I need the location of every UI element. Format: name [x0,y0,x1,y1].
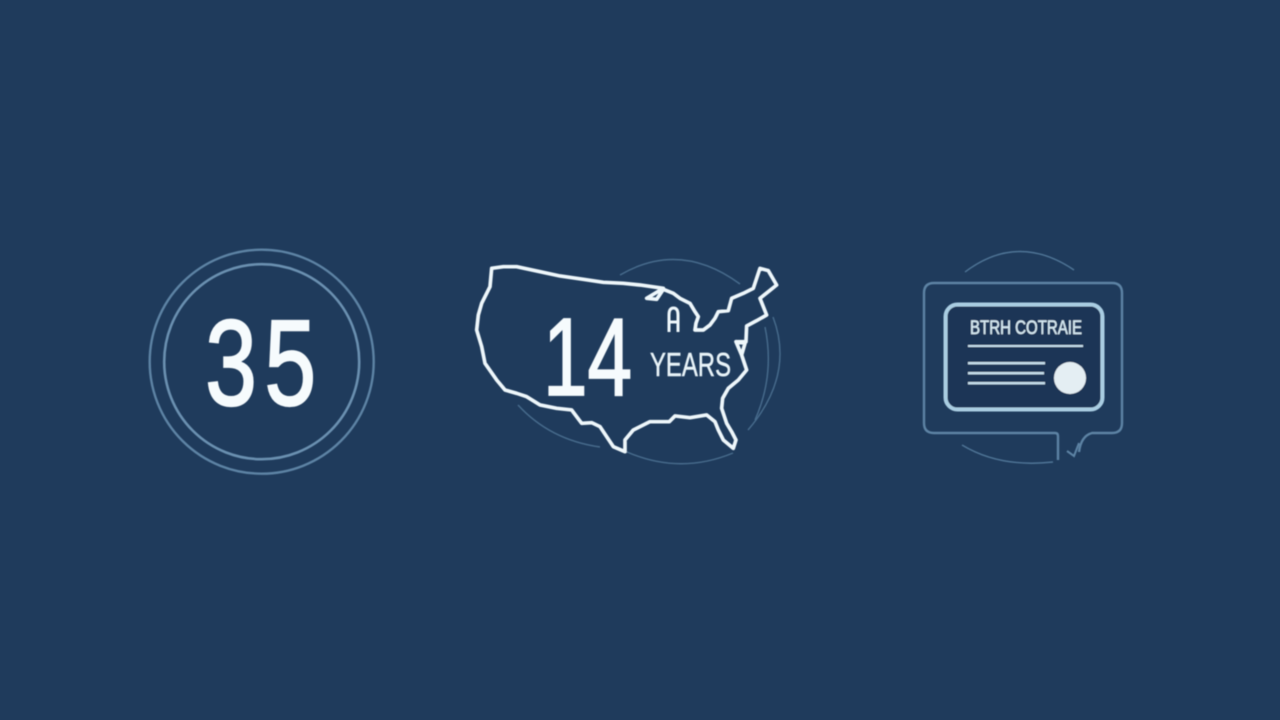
certificate title: BTRH COTRAIE [970,318,1082,339]
panel: age 35 badge [150,250,374,474]
icon: outer speech frame [924,283,1122,460]
map: United States outline [477,267,777,452]
icon: check mark [1067,443,1079,456]
inlet: Lake Michigan stroke [669,308,678,332]
number: 35: 35 [205,295,316,431]
panel: 14 years US residency [477,259,780,464]
certificate card [946,304,1102,410]
decorative arcs [962,251,1074,463]
label: YEARS: YEARS [650,346,731,383]
decorative orbit arcs [518,259,780,464]
text lines [968,362,1045,384]
panel: birth certificate [924,251,1122,463]
number: 14: 14 [543,296,632,419]
icon: outer ring [150,250,374,474]
title rule [968,345,1083,347]
seal [1054,362,1086,394]
icon: inner ring [164,264,359,459]
